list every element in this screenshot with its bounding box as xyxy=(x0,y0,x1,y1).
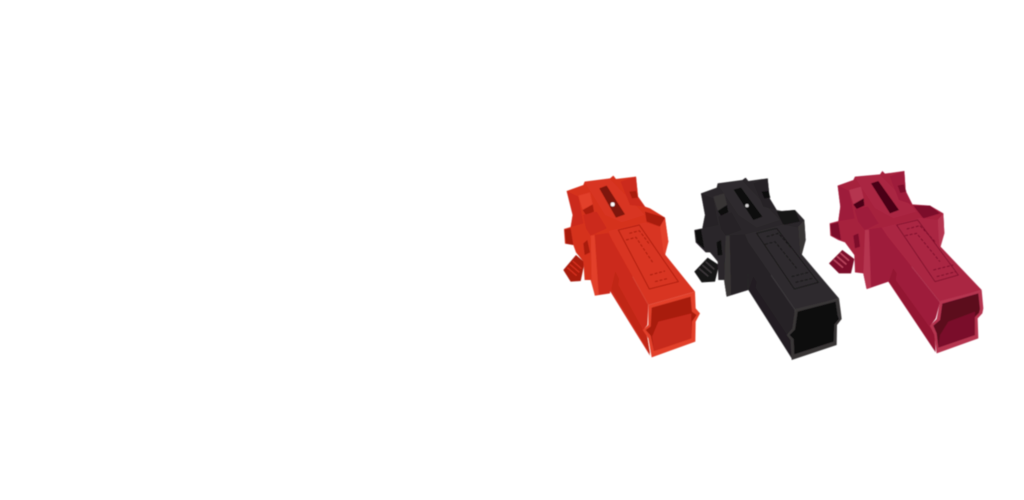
black connector xyxy=(694,178,842,360)
red connector xyxy=(563,176,700,357)
crimson connector xyxy=(829,171,983,353)
